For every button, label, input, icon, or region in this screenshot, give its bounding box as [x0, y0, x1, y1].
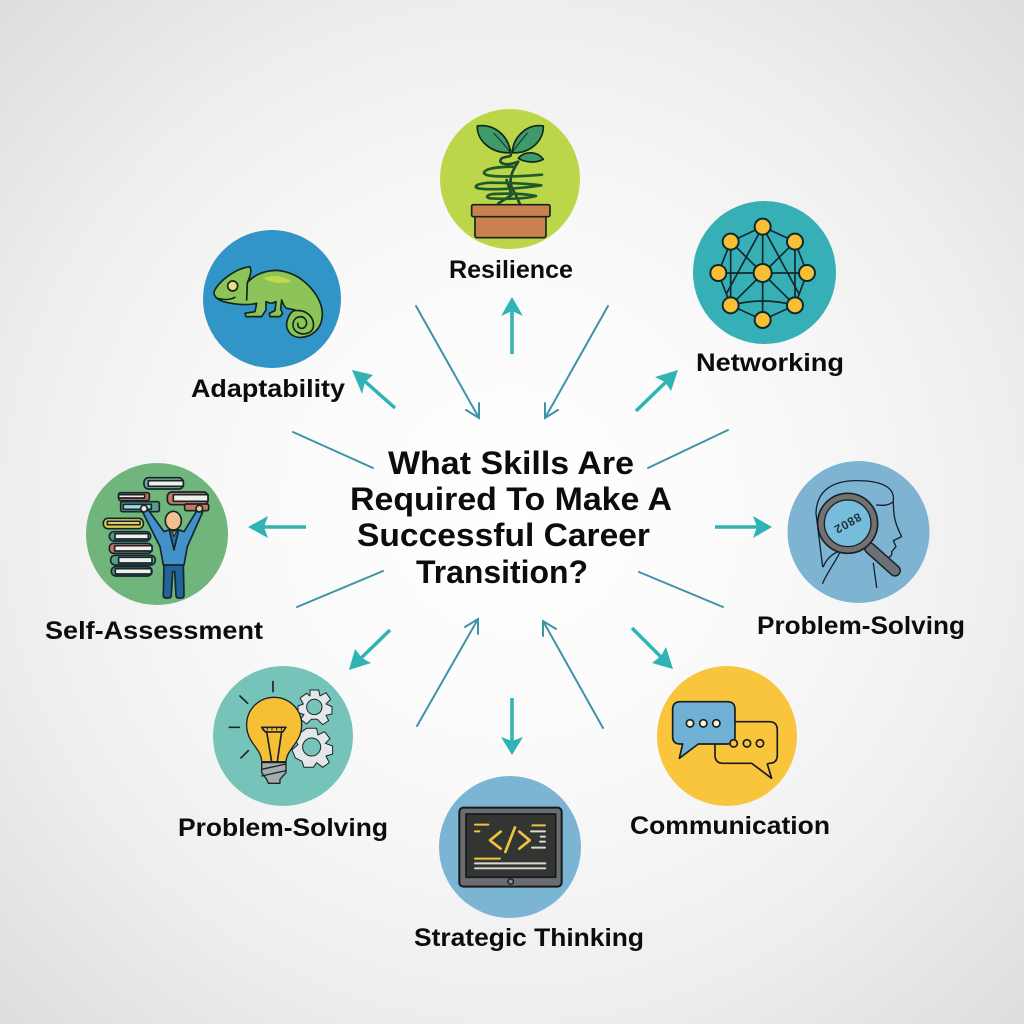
icon: spiral plant in pot	[472, 126, 550, 238]
title	[350, 445, 672, 590]
label: adaptability: Adaptability	[191, 375, 345, 403]
arrow: to self-assessment	[248, 516, 306, 538]
label: resilience: Resilience	[449, 256, 573, 284]
icon: light bulb with gears	[229, 682, 333, 783]
panel: resilience	[440, 109, 580, 284]
icon: network nodes	[710, 219, 815, 328]
icon: chameleon	[214, 267, 322, 337]
arrow: to resilience	[501, 297, 523, 354]
icon: person holding books	[103, 478, 209, 598]
label: networking: Networking	[696, 349, 844, 377]
arrow: to problem-solving left	[349, 630, 390, 670]
arrow: to adaptability	[352, 370, 395, 408]
panel: problem-solving left	[178, 666, 388, 842]
label: communication: Communication	[630, 812, 830, 840]
panel: self-assessment	[45, 463, 264, 645]
title: Required To Make A	[350, 481, 672, 517]
arrow: to strategic thinking	[501, 698, 523, 755]
icon: code tablet	[459, 808, 562, 887]
arrow: to networking	[636, 370, 678, 411]
panel: networking	[693, 201, 844, 377]
panel: problem-solving right	[757, 461, 965, 640]
icon: speech bubbles	[673, 702, 777, 778]
panel: strategic thinking	[414, 776, 644, 952]
label: strategic thinking: Strategic Thinking	[414, 924, 644, 952]
icon: head with magnifying glass: 8802	[831, 510, 864, 537]
icon: head with magnifying glass	[816, 481, 902, 587]
panel: communication	[630, 666, 830, 840]
title: Transition?	[416, 554, 588, 590]
label: problem-solving right: Problem-Solving	[757, 612, 965, 640]
arrow: to communication	[632, 628, 673, 669]
title: What Skills Are	[388, 445, 634, 481]
arrow: to problem-solving right	[715, 516, 772, 538]
panel: adaptability	[191, 230, 345, 403]
thin inward arrows and rays	[293, 306, 728, 728]
title: Successful Career	[357, 517, 650, 553]
label: self-assessment: Self-Assessment	[45, 617, 264, 645]
label: problem-solving left: Problem-Solving	[178, 814, 388, 842]
